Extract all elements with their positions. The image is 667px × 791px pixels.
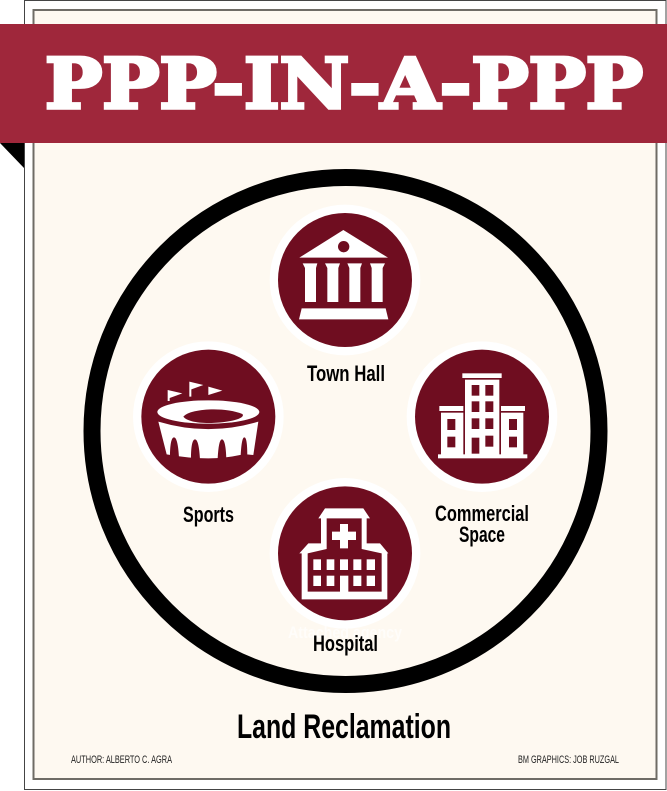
ribbon fold	[0, 143, 24, 168]
credit: graphics: BM GRAPHICS: JOB RUZGAL	[518, 754, 619, 766]
label: commercial space: Space	[459, 522, 505, 547]
label: sports: Sports	[183, 502, 234, 527]
title banner	[0, 24, 667, 143]
label: hospital: Hospital	[313, 631, 378, 656]
label: town hall: Town Hall	[307, 361, 385, 386]
label: commercial space	[435, 501, 529, 547]
icon: hospital	[270, 478, 420, 629]
icon: sports stadium	[133, 341, 284, 492]
land reclamation ring	[92, 178, 599, 684]
title: PPP-IN-A-PPP	[45, 44, 643, 125]
heading: land reclamation: Land Reclamation	[237, 708, 451, 746]
ghost label: attached agency: Attached agency	[288, 623, 402, 642]
icon: commercial building	[407, 341, 557, 492]
label: commercial space: Commercial	[435, 501, 529, 526]
icon: town hall	[270, 205, 420, 355]
credit: author: AUTHOR: ALBERTO C. AGRA	[71, 754, 172, 766]
